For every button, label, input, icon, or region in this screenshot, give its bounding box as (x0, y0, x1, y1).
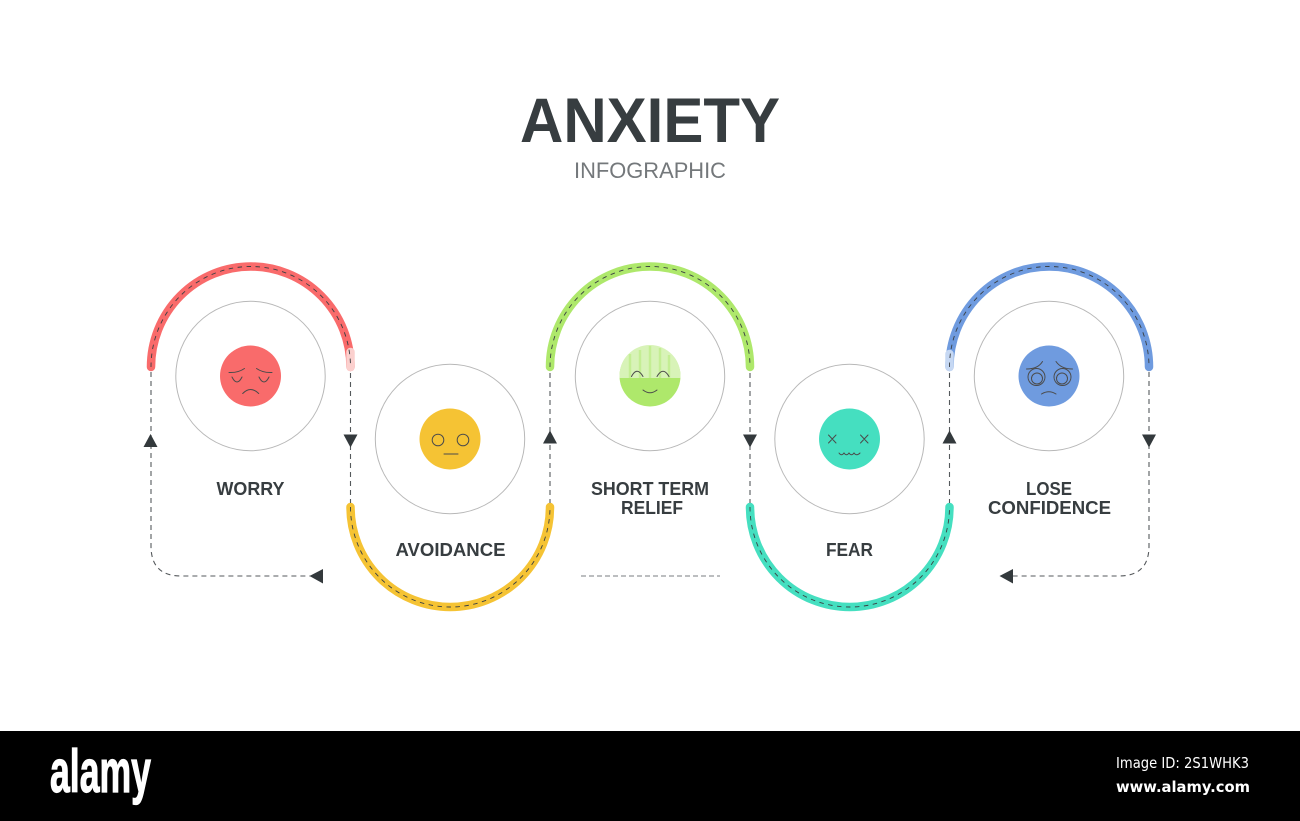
icon: scared face (819, 408, 880, 470)
step 4: fear (750, 364, 950, 607)
arrow: return path right (1000, 372, 1156, 584)
label: lose confidence: CONFIDENCE (988, 498, 1111, 518)
arrow: fear to lose confidence (942, 373, 956, 503)
label: short term relief: RELIEF (621, 498, 683, 518)
arrow: relief to fear (743, 373, 757, 503)
outline circle (375, 364, 525, 514)
label: fear: FEAR (826, 540, 873, 560)
icon: blank face (420, 408, 480, 470)
step 3: short term relief (550, 266, 750, 518)
dashed centre line (581, 575, 720, 577)
blue arc (950, 266, 1149, 367)
label: lose confidence: LOSE (1026, 479, 1072, 499)
icon: relieved face (620, 345, 681, 406)
step 2: avoidance (350, 364, 550, 607)
outline circle (974, 301, 1124, 451)
label: avoidance: AVOIDANCE (396, 540, 506, 560)
teal arc (750, 507, 950, 607)
outline circle (176, 301, 325, 451)
step 5: lose confidence (950, 266, 1149, 518)
label: worry: WORRY (216, 479, 284, 499)
title: ANXIETY (520, 86, 780, 156)
website: www.alamy.com (1116, 778, 1250, 796)
label: lose confidence (988, 479, 1111, 518)
icon: teary face (1018, 346, 1080, 406)
image id: Image ID: 2S1WHK3 (1116, 754, 1249, 772)
arrow: worry to avoidance (344, 373, 358, 503)
footer band (0, 731, 1300, 821)
step 1: worry (151, 266, 350, 499)
label: short term relief: SHORT TERM (591, 479, 709, 499)
icon: worried face (220, 346, 281, 406)
arrow: avoidance to relief (543, 373, 557, 503)
red arc (151, 266, 350, 367)
green arc (550, 266, 750, 367)
subtitle: INFOGRAPHIC (574, 158, 726, 183)
label: short term relief (591, 479, 709, 518)
alamy logo: alamy (50, 738, 151, 805)
arrow: return path left (144, 372, 323, 584)
yellow arc (350, 507, 550, 607)
outline circle (775, 364, 924, 514)
outline circle (575, 301, 725, 451)
